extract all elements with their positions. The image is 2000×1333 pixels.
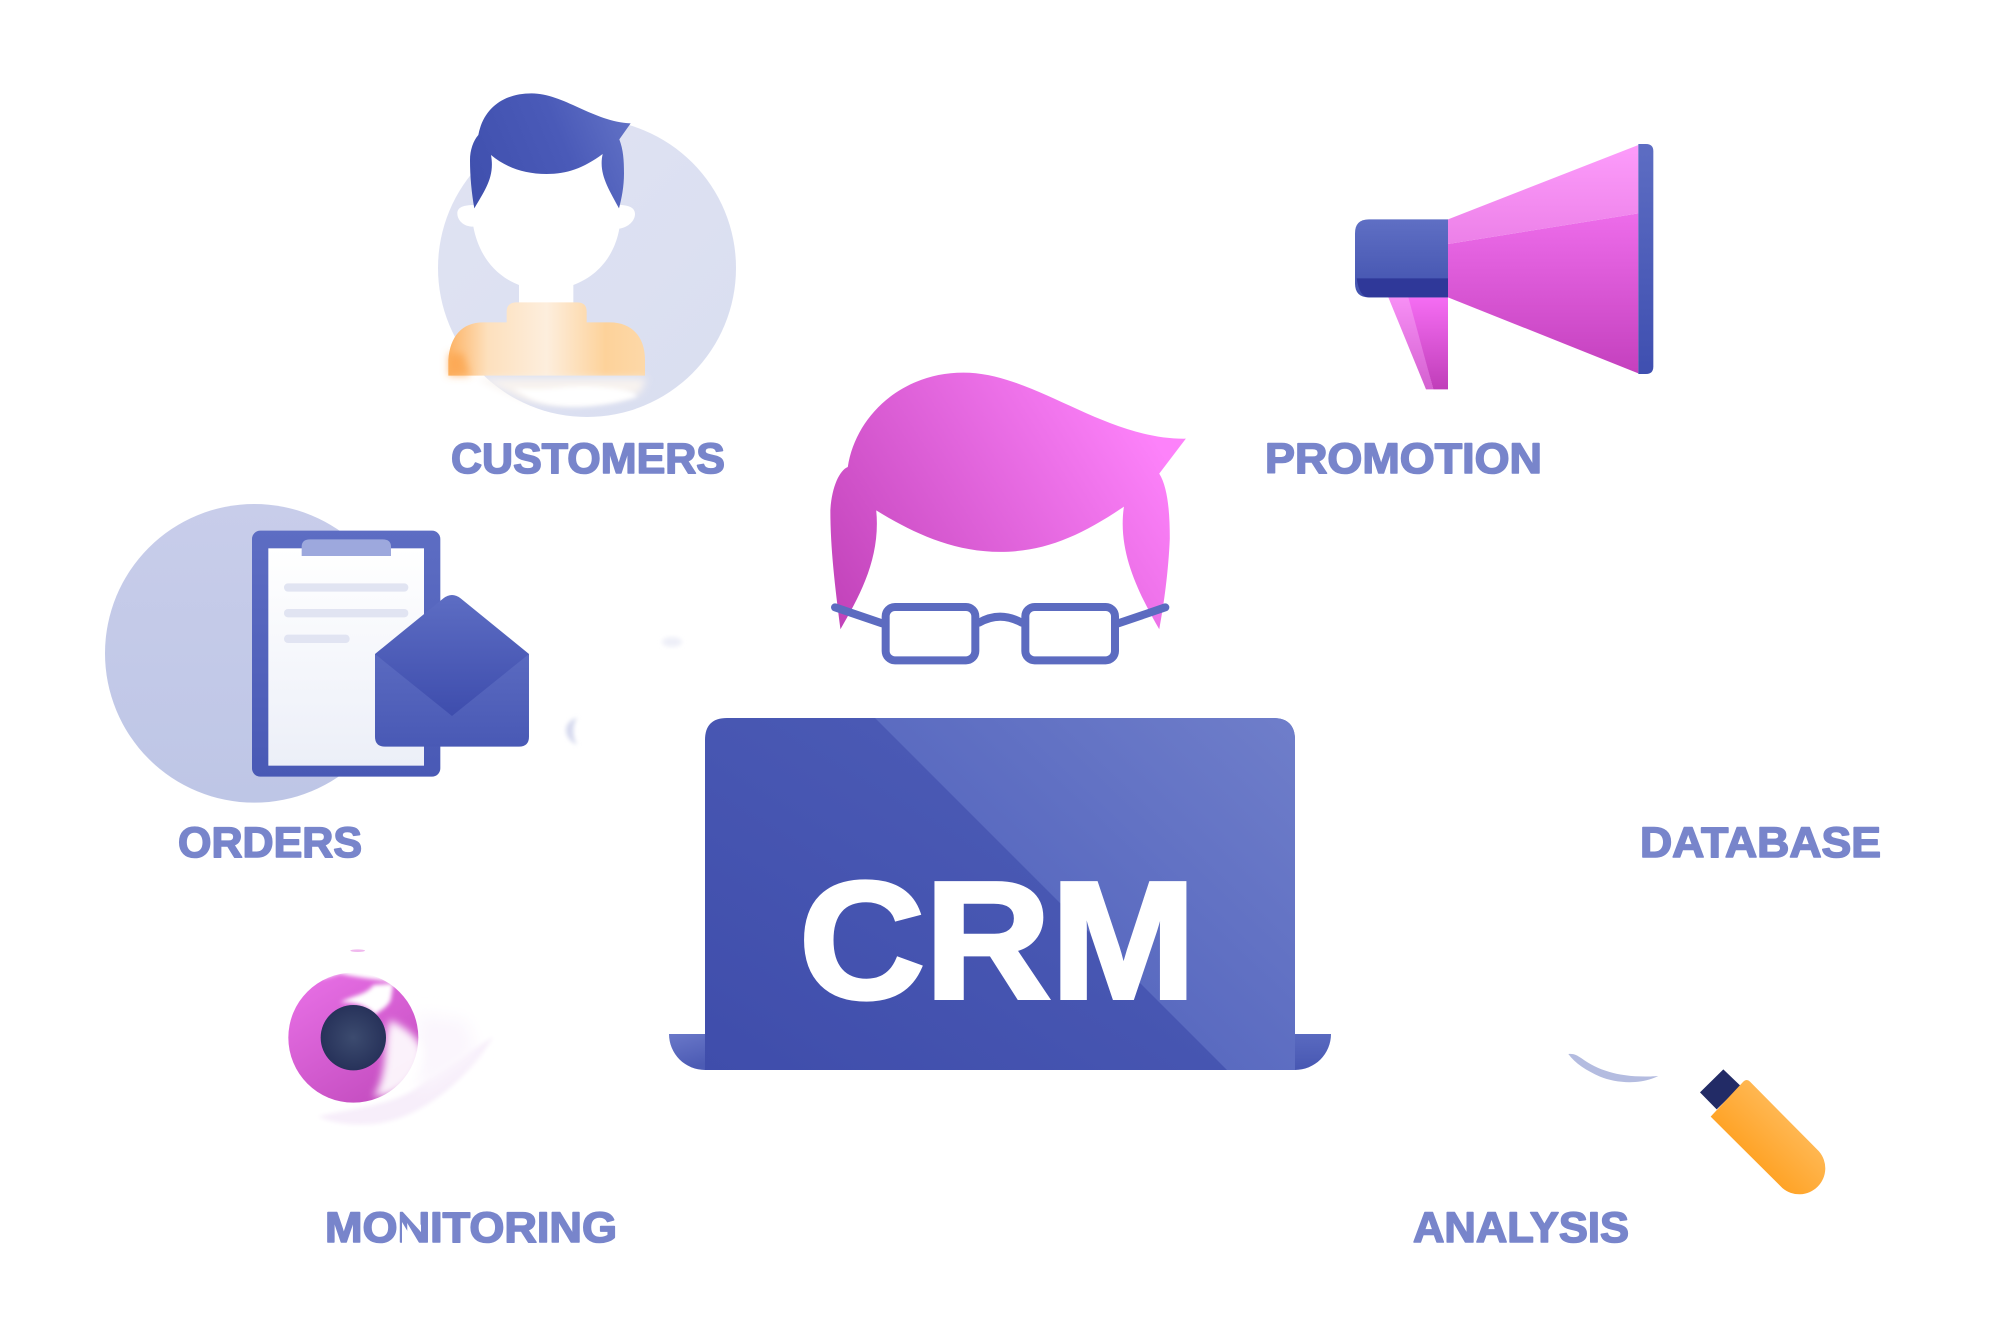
orders background circle: [105, 504, 404, 803]
iris highlights: [300, 963, 423, 1097]
person hair: [830, 373, 1186, 629]
monitoring text streak: [402, 1211, 421, 1244]
laptop screen: [705, 718, 1295, 1070]
customer shirt: [448, 302, 645, 376]
label: monitoring: MONITORING: [325, 1204, 617, 1252]
laptop screen highlight: [875, 718, 1295, 1070]
eye pupil: [321, 1005, 386, 1070]
megaphone foot: [1388, 297, 1448, 389]
panel: analysis magnifier: [1568, 1054, 1825, 1194]
label: orders: ORDERS: [178, 819, 362, 867]
customer lower highlight: [513, 386, 637, 406]
eye lower smear: [318, 1037, 493, 1125]
label: promotion: PROMOTION: [1265, 435, 1542, 483]
panel: monitoring eye: [288, 949, 493, 1125]
label: customers: CUSTOMERS: [451, 435, 725, 483]
customer lower shade: [477, 378, 647, 405]
customer figure: [448, 93, 647, 406]
lens smear: [1568, 1054, 1658, 1082]
customer shirt orange corner: [449, 353, 470, 376]
panel: orders icon: [105, 504, 577, 803]
megaphone handle: [1355, 219, 1448, 297]
laptop title: CRM: [799, 848, 1196, 1034]
magnifier collar: [1700, 1069, 1741, 1109]
label: analysis: ANALYSIS: [1413, 1204, 1629, 1252]
magnifier handle: [1711, 1080, 1825, 1194]
eye iris: [288, 973, 418, 1103]
envelope: [375, 595, 529, 747]
eye top fragment: [350, 949, 365, 952]
panel: central person: [830, 373, 1186, 660]
megaphone rim: [1638, 144, 1653, 374]
laptop base flaps: [669, 1034, 1331, 1070]
faint fragment: [566, 717, 577, 745]
customer face and neck: [457, 150, 635, 303]
panel: customers icon: [438, 93, 736, 417]
faint fragment near head: [662, 637, 682, 647]
customer hair: [470, 93, 631, 208]
clipboard: [252, 531, 440, 777]
label: database: DATABASE: [1640, 819, 1881, 867]
panel: promotion megaphone: [1355, 144, 1653, 389]
megaphone horn: [1448, 145, 1638, 373]
customers background circle: [438, 119, 736, 417]
panel: laptop: [669, 718, 1331, 1070]
glasses: [835, 607, 1165, 660]
eye right smear: [417, 1013, 477, 1093]
